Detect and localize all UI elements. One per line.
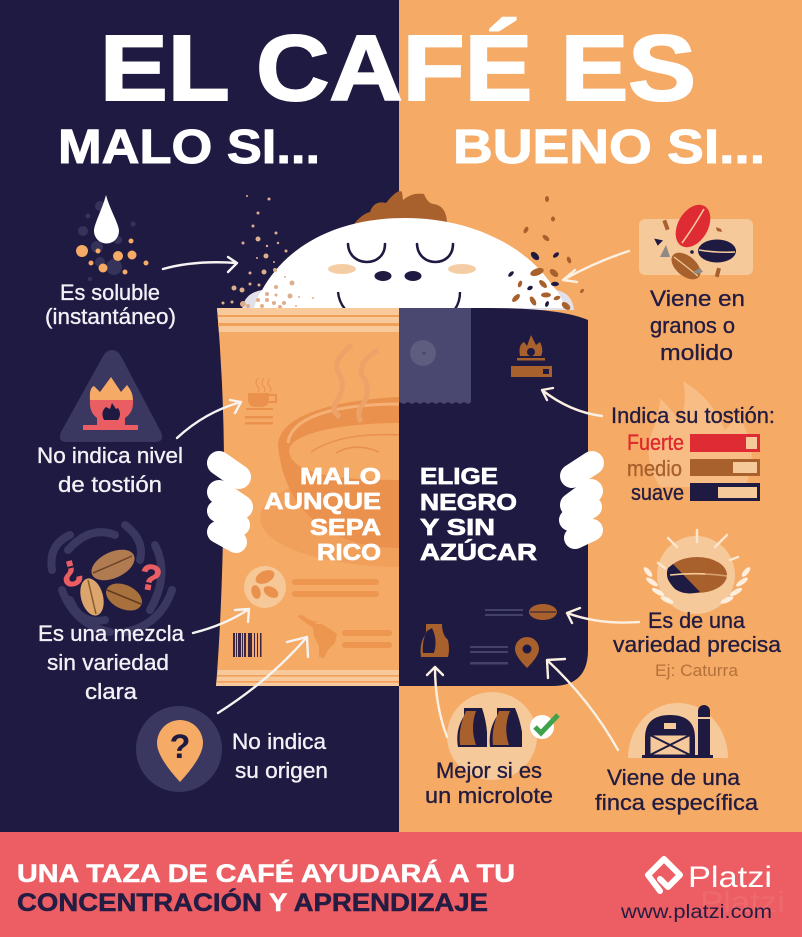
bag: orange left panel — [216, 308, 400, 686]
arrow: mix — [193, 609, 249, 633]
bag: roast icon — [511, 335, 552, 377]
bag text: malo: RICO — [317, 539, 381, 565]
bag text: malo: SEPA — [310, 514, 381, 540]
icon: soluble drop — [76, 195, 148, 281]
footer text: CONCENTRACIÓN Y APRENDIZAJE — [17, 887, 488, 917]
icon: whole beans — [639, 199, 753, 285]
text: no indica nivel de tostion: de tostión — [58, 472, 162, 497]
footer band — [0, 832, 802, 937]
left hand — [218, 463, 241, 542]
icon: award bean — [642, 530, 752, 614]
icon: microlot bags — [447, 692, 558, 780]
logo: platzi: Platzi — [700, 886, 785, 919]
bag: variety text lines — [292, 579, 379, 597]
arrow: roast level — [542, 388, 602, 416]
bag: small cup icon — [245, 378, 276, 424]
text: variedad precisa: Es de una — [648, 608, 746, 633]
text: es una mezcla: sin variedad — [47, 650, 169, 675]
logo: platzi: www.platzi.com — [620, 902, 772, 923]
footer text: UNA TAZA DE CAFÉ AYUDARÁ A TU — [17, 859, 515, 888]
text: variedad precisa — [613, 608, 782, 680]
icon: unknown origin pin — [136, 706, 222, 792]
logo: platzi — [620, 859, 785, 923]
bag: gusset with valve — [399, 308, 471, 404]
text: no indica su origen: No indica — [232, 729, 327, 754]
icon: bean mix swirl — [51, 525, 172, 632]
text: es soluble: Es soluble — [60, 280, 160, 305]
arrow: origin — [218, 637, 308, 713]
text: microlote: Mejor si es — [436, 758, 542, 783]
bag: navy right panel — [399, 308, 588, 686]
icon: roast flame triangle — [60, 350, 162, 442]
bag: latin america map — [297, 615, 337, 658]
text: finca especifica: finca específica — [595, 790, 759, 815]
text: es una mezcla — [38, 621, 185, 704]
arrow: beans — [563, 251, 629, 282]
text: es soluble — [45, 280, 176, 329]
text: indica su tostion: Indica su tostión: — [611, 403, 775, 428]
roast legend: Fuerte — [627, 430, 684, 455]
bag text: elige: Y SIN — [420, 514, 495, 540]
arrow: soluble — [163, 257, 237, 272]
roast legend: suave — [631, 480, 684, 505]
icon: bean mix swirl: ? — [136, 555, 165, 599]
bag: big coffee cup illustration — [260, 397, 399, 567]
soluble particles — [222, 195, 314, 309]
heading: malo si: MALO SI... — [58, 121, 320, 174]
icon: bean mix swirl: ¿ — [54, 545, 86, 590]
text: finca especifica — [595, 765, 759, 815]
text: no indica su origen — [232, 729, 328, 783]
logo: platzi: Platzi — [688, 861, 772, 894]
bag: mini bag icon — [421, 624, 449, 657]
text: viene en granos: molido — [660, 340, 733, 365]
background: orange right half — [399, 0, 802, 832]
text: viene en granos — [650, 286, 745, 365]
text: no indica nivel de tostion: No indica nivel — [37, 443, 183, 468]
icon: unknown origin pin: ? — [170, 728, 190, 766]
text: variedad precisa: Ej: Caturra — [655, 661, 739, 680]
text: es una mezcla: clara — [85, 679, 138, 704]
coffee bag — [216, 308, 588, 686]
footer text — [17, 859, 515, 917]
arrow: microlot — [427, 667, 447, 737]
bag text: elige: AZÚCAR — [420, 538, 537, 565]
arrow: variety — [567, 608, 639, 623]
icon: farm barn — [628, 703, 728, 758]
text: viene en granos: Viene en — [650, 286, 745, 311]
text: no indica nivel de tostion — [37, 443, 183, 497]
bag: pin icon and lines — [470, 637, 539, 668]
icon: background flame — [649, 381, 752, 487]
title: EL CAFÉ ES — [100, 16, 696, 120]
bag text: malo: MALO — [300, 463, 381, 489]
bag: bean circle icon — [244, 566, 286, 608]
bag: origin text lines — [342, 630, 392, 648]
ground coffee particles — [507, 196, 585, 312]
text: es soluble: (instantáneo) — [45, 304, 176, 329]
arrow: farm — [547, 659, 618, 750]
heading: bueno si: BUENO SI... — [453, 121, 765, 174]
text: finca especifica: Viene de una — [607, 765, 741, 790]
text: microlote: un microlote — [425, 783, 553, 808]
text: microlote — [425, 758, 553, 808]
arrow: roast — [177, 400, 241, 438]
bag: barcode — [233, 633, 262, 657]
text: variedad precisa: variedad precisa — [613, 632, 782, 657]
text: es una mezcla: Es una mezcla — [38, 621, 185, 646]
bag text: malo — [264, 463, 381, 565]
bag text: malo: AUNQUE — [264, 488, 381, 514]
background: dark left half — [0, 0, 399, 832]
text: viene en granos: granos o — [650, 313, 735, 338]
bag text: elige: ELIGE — [420, 463, 498, 489]
text: no indica su origen: su origen — [235, 758, 328, 783]
bag text: elige — [420, 463, 537, 565]
bag: top stripes — [217, 308, 400, 332]
roast legend: medio — [627, 456, 682, 481]
bag text: elige: NEGRO — [420, 489, 517, 515]
bag: bottom stripes — [216, 670, 400, 686]
roast legend — [627, 430, 760, 505]
character head — [242, 191, 574, 310]
bag: bean and variety lines — [485, 604, 557, 620]
right hand — [570, 463, 592, 538]
